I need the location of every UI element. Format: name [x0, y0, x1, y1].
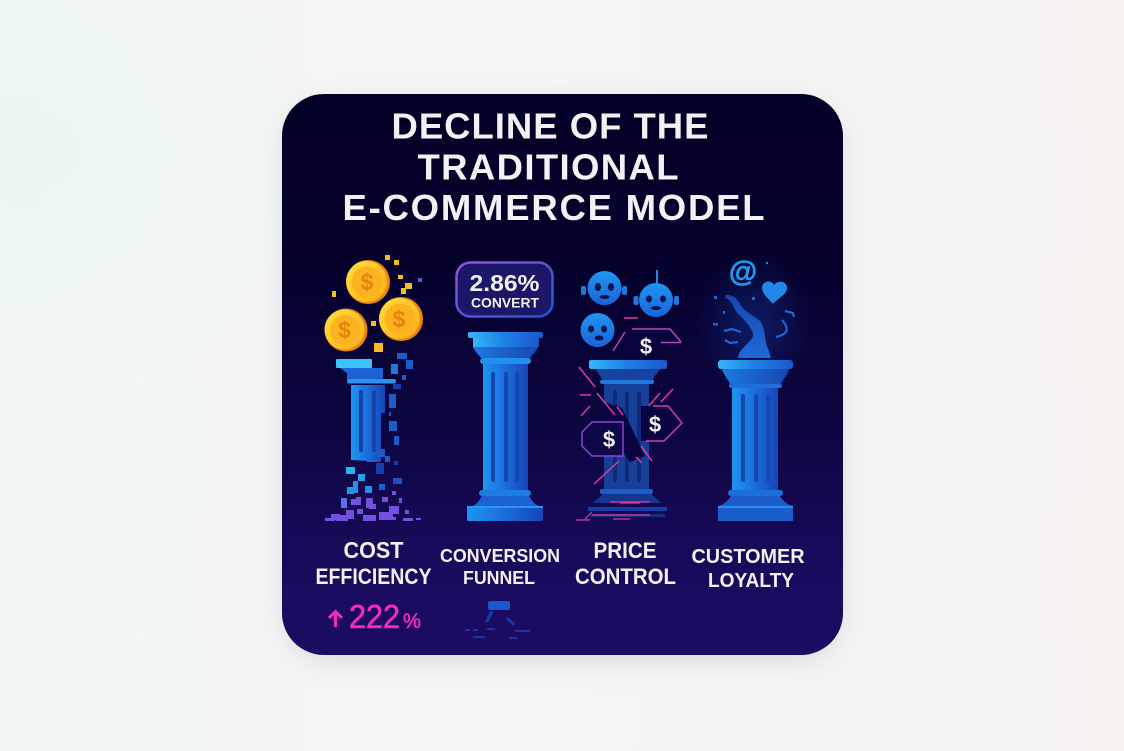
icon: gold coins: $	[361, 269, 374, 295]
statistic: up 222%: %	[403, 610, 421, 633]
label: cost efficiency: COST	[344, 537, 404, 563]
callout: 2.86% convert	[456, 262, 552, 316]
label: cost efficiency	[316, 537, 432, 589]
pillar 2: conversion funnel, intact	[456, 262, 552, 521]
label: conversion funnel	[440, 545, 560, 588]
broken capital and shaft	[336, 359, 396, 462]
broken column	[588, 360, 667, 517]
label: conversion funnel: CONVERSION	[440, 545, 560, 566]
label: conversion funnel: FUNNEL	[463, 567, 535, 588]
callout: 2.86% convert: CONVERT	[471, 296, 540, 310]
icon: heart	[762, 281, 787, 304]
pillar 3: price control, fractured	[576, 270, 682, 520]
title: TRADITIONAL	[418, 146, 678, 188]
purple pixel rubble	[325, 491, 421, 521]
label: price control: PRICE	[594, 538, 656, 563]
icon: gold coins	[324, 260, 423, 352]
title: E-COMMERCE MODEL	[342, 187, 764, 228]
price tag: top: $	[640, 334, 652, 359]
label: price control	[575, 538, 676, 589]
price tag: top	[613, 329, 681, 359]
shards and broken lines	[576, 318, 673, 520]
label: cost efficiency: EFFICIENCY	[316, 564, 432, 589]
statistic: up 222%	[329, 598, 421, 635]
price tag: left: $	[603, 427, 615, 452]
blue pixel debris	[346, 353, 413, 494]
price tag: left	[582, 422, 623, 456]
callout: 2.86% convert: 2.86%	[470, 270, 540, 296]
icon: at sign: @	[729, 256, 757, 288]
label: price control: CONTROL	[575, 564, 676, 589]
title: DECLINE OF THE	[392, 106, 708, 146]
price tag: right: $	[649, 412, 661, 437]
statistic: up 222%: 222	[349, 598, 400, 635]
icon: gold coins: $	[393, 306, 406, 332]
pillar 1: cost efficiency, crumbling	[324, 255, 423, 521]
icon: robot faces	[580, 270, 679, 347]
panel: dark card	[282, 94, 843, 655]
gold fragments	[332, 255, 422, 352]
label: customer loyalty	[692, 545, 805, 592]
pillar 4: customer loyalty, dissolving	[697, 253, 813, 521]
small faded pillar fragment	[465, 601, 530, 638]
title	[342, 106, 764, 228]
label: customer loyalty: CUSTOMER	[692, 545, 805, 568]
label: customer loyalty: LOYALTY	[708, 569, 794, 592]
column	[467, 332, 543, 521]
price tag: right	[641, 406, 682, 441]
column	[718, 360, 793, 521]
smoke	[713, 262, 794, 358]
icon: gold coins: $	[338, 317, 351, 343]
